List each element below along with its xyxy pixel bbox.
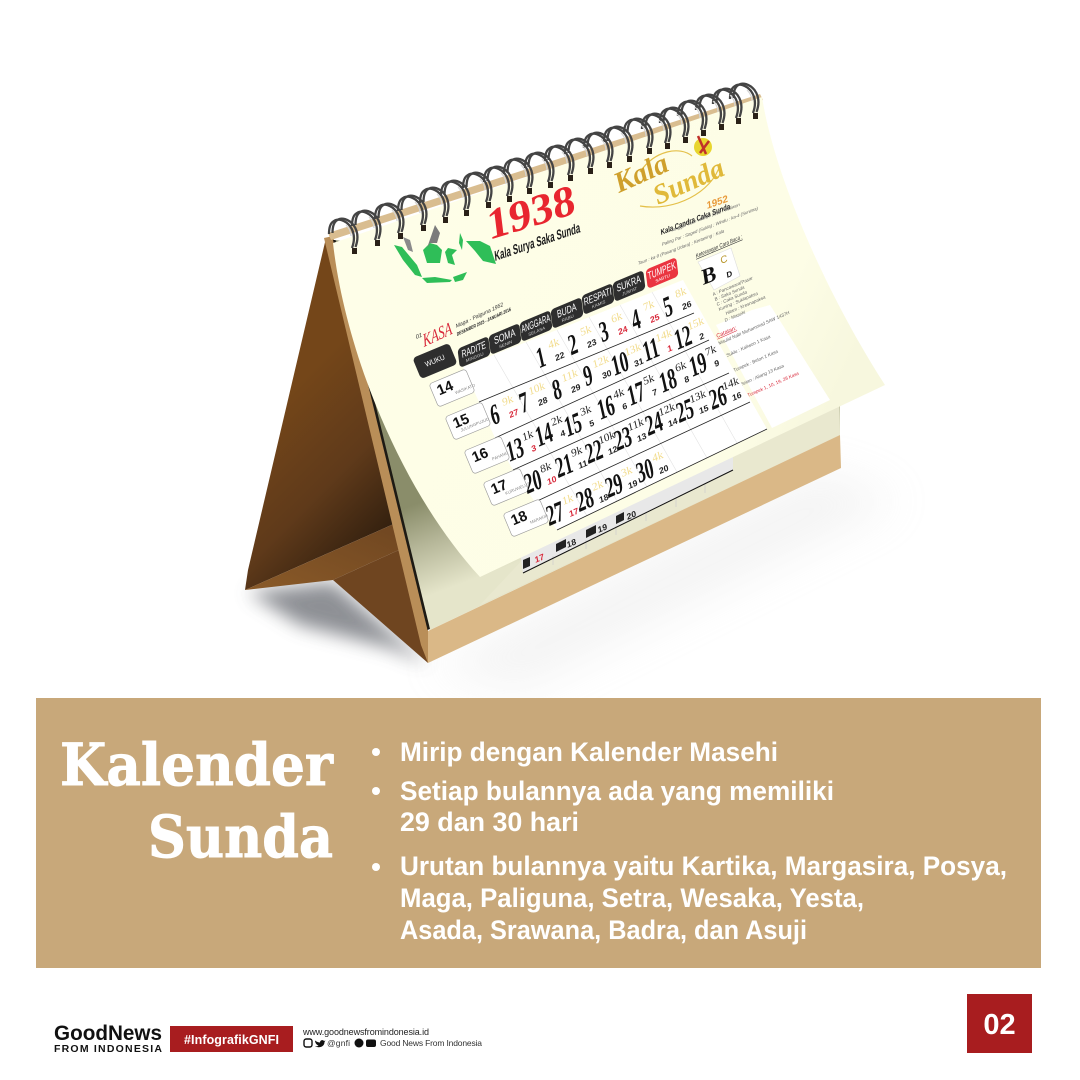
calendar dates: 5 xyxy=(661,290,676,325)
calendar dates: 3 xyxy=(597,315,612,350)
page number xyxy=(967,994,1032,1053)
lower page peek: 20 xyxy=(626,508,637,522)
calendar dates: 15 xyxy=(698,403,710,416)
spine band xyxy=(328,94,763,240)
ANGGARA: ANGGARA xyxy=(521,312,551,336)
bullet: month length xyxy=(372,776,834,837)
calendar dates: 5k xyxy=(579,323,593,339)
panel heading xyxy=(60,731,334,871)
grid lines xyxy=(479,292,767,530)
calendar dates: 22 xyxy=(554,350,566,363)
footer logo: GoodNews xyxy=(54,1022,162,1045)
WUKU: WUKU xyxy=(424,352,446,369)
TUMPEK: SABTU xyxy=(655,273,670,284)
calendar dates: 28 xyxy=(537,395,549,408)
calendar dates: 26 xyxy=(681,299,693,312)
notes: Suklu : Kaliwon 1 Kasa xyxy=(726,334,771,358)
calendar dates: 6 xyxy=(488,398,503,433)
wuku 17: KURUWELUT xyxy=(504,481,531,496)
desk calendar xyxy=(245,84,885,663)
calendar dates: 1k xyxy=(521,428,535,444)
SUKRA xyxy=(612,270,646,302)
SOMA: SOMA xyxy=(493,327,516,347)
wuku 17: 17 xyxy=(489,477,510,498)
calendar dates: 24 xyxy=(643,406,666,443)
calendar dates: 7 xyxy=(517,386,532,421)
calendar dates: 9k xyxy=(501,393,515,409)
lower page peek: 18 xyxy=(566,536,577,550)
calendar dates: 5k xyxy=(642,372,656,388)
calendar dates: 14k xyxy=(722,375,740,393)
calendar dates: 8 xyxy=(683,374,690,385)
page number: 02 xyxy=(983,1009,1016,1041)
hashtag badge: #InfografikGNFI xyxy=(184,1033,279,1047)
wuku 14 xyxy=(429,368,478,407)
calendar dates: 15k xyxy=(687,315,705,333)
Kala Sunda logo xyxy=(608,136,729,211)
wuku 14: WASIKATO xyxy=(454,382,477,395)
reading key: Kuning : Suklapaksa xyxy=(718,291,759,312)
calendar dates: 4k xyxy=(547,336,561,352)
calendar dates: 9k xyxy=(570,444,584,460)
calendar dates: 25 xyxy=(649,312,661,325)
calendar dates: 10 xyxy=(546,474,558,487)
TUMPEK xyxy=(645,257,679,289)
RESPATI xyxy=(581,283,615,315)
calendar dates: 3 xyxy=(530,443,537,454)
bullet: month order: Asada, Srawana, Badra, dan Asuji xyxy=(400,915,807,945)
calendar dates: 12 xyxy=(672,320,695,357)
ANGGARA xyxy=(519,310,553,342)
calendar dates: 18 xyxy=(598,492,610,505)
1952 block: Tanggal Taun : ka-1 / 1952 : Kaliwon xyxy=(671,202,740,233)
notes: Catatan: xyxy=(716,325,738,340)
tan base xyxy=(428,435,841,663)
weekday headers xyxy=(412,257,679,379)
footer logo xyxy=(54,1022,162,1055)
info panel xyxy=(36,698,1041,968)
RESPATI: KAMIS xyxy=(592,299,606,309)
hashtag badge xyxy=(170,1026,293,1052)
spiral binding xyxy=(329,84,759,254)
calendar dates: 19 xyxy=(687,347,710,384)
TUMPEK: TUMPEK xyxy=(647,259,677,283)
reading key: A : Pancawara/Pasar xyxy=(712,275,754,297)
calendar dates: 6k xyxy=(674,359,688,375)
tent floor fold xyxy=(245,523,401,590)
calendar dates: 31 xyxy=(633,356,645,369)
notes xyxy=(716,310,800,398)
calendar dates: 29 xyxy=(603,468,626,505)
calendar dates: 10k xyxy=(598,429,616,447)
panel heading: Kalender xyxy=(60,731,334,799)
calendar dates: 14k xyxy=(655,327,673,345)
wuku 16: PAHANG xyxy=(491,450,509,461)
notes: Tumpek 1, 10, 19, 28 Kasa xyxy=(747,370,800,398)
calendar dates: 30 xyxy=(601,368,613,381)
1952 block: Kala Candra Caka Sunda xyxy=(660,202,731,237)
icon: youtube xyxy=(366,1040,376,1047)
wuku 16: 16 xyxy=(470,445,491,466)
calendar dates: 4k xyxy=(651,449,665,465)
icon: instagram xyxy=(304,1039,312,1047)
wuku 15: JULUNGPUJUD xyxy=(460,416,490,433)
SOMA xyxy=(488,323,522,355)
calendar dates: 23 xyxy=(612,421,635,458)
calendar dates: 15 xyxy=(562,407,585,444)
year 1938: 1938 xyxy=(484,175,577,250)
calendar dates: 26 xyxy=(707,380,730,417)
calendar dates: 19 xyxy=(627,478,639,491)
reading key: C : Caka Sunda xyxy=(716,289,748,307)
calendar dates: 16 xyxy=(595,390,618,427)
sheet black edge xyxy=(333,240,430,630)
calendar dates: 22 xyxy=(583,434,606,471)
calendar dates: 3k xyxy=(579,403,593,419)
calendar dates: 4 xyxy=(629,303,644,338)
1952 block: 1952 xyxy=(706,194,729,212)
calendar dates: 10k xyxy=(528,380,546,398)
calendar dates: 23 xyxy=(586,337,598,350)
icon: facebook xyxy=(354,1038,364,1048)
calendar dates: 20 xyxy=(522,464,545,501)
calendar dates: 16 xyxy=(731,390,743,403)
cream lower sheet xyxy=(480,380,840,605)
calendar dates: 1 xyxy=(666,343,673,354)
calendar dates: 2 xyxy=(566,328,581,363)
tent right flap xyxy=(333,549,428,663)
BUDA xyxy=(550,297,584,329)
calendar dates: 4 xyxy=(559,428,566,439)
month heading: Maga - Palguna 1952 xyxy=(456,302,503,330)
right note white panel xyxy=(716,305,830,428)
Kala Sunda logo: Kala xyxy=(608,147,673,200)
footer contacts: @gnfi xyxy=(327,1038,350,1048)
tent back face xyxy=(245,238,400,590)
calendar dates: 8 xyxy=(550,373,565,408)
calendar dates: 21 xyxy=(553,448,576,485)
calendar dates: 1k xyxy=(561,492,575,508)
bullet: similar to Masehi: Mirip dengan Kalender Masehi xyxy=(400,737,778,767)
wuku 17 xyxy=(483,466,533,506)
BUDA: BUDA xyxy=(556,301,577,321)
month heading xyxy=(416,302,511,351)
wuku 18 xyxy=(503,498,550,537)
calendar dates: 9 xyxy=(581,359,596,394)
calendar dates: 9 xyxy=(713,358,720,369)
calendar dates: 3k xyxy=(620,464,634,480)
reading key: B : Saka Sunda xyxy=(714,284,745,302)
calendar dates: 25 xyxy=(674,393,697,430)
wuku 14: 14 xyxy=(435,378,457,399)
calendar dates: 12 xyxy=(607,444,619,457)
reading key: D : Masehi xyxy=(724,310,746,323)
calendar dates: 28 xyxy=(574,482,597,519)
cardboard edge xyxy=(324,236,428,663)
wuku 18: MARAKIH xyxy=(529,513,549,525)
calendar dates: 20 xyxy=(658,463,670,476)
calendar dates: 11k xyxy=(627,416,645,434)
Kala Sunda logo: Sunda xyxy=(648,153,729,211)
calendar dates: 6k xyxy=(610,310,624,326)
calendar dates: 2k xyxy=(550,413,564,429)
wuku 15 xyxy=(445,402,491,440)
calendar dates: 13 xyxy=(504,432,527,469)
ANGGARA: SELASA xyxy=(528,325,545,337)
month heading: 01 xyxy=(416,332,423,341)
main page xyxy=(333,97,885,577)
calendar dates: 12k xyxy=(658,401,676,419)
RADITE: RADITE xyxy=(461,339,486,361)
wuku 18: 18 xyxy=(509,508,530,529)
calendar dates: 11k xyxy=(561,367,579,385)
calendar dates: 14 xyxy=(533,417,556,454)
calendar grid background xyxy=(463,280,767,530)
calendar dates: 17 xyxy=(625,376,648,413)
calendar dates: 5 xyxy=(588,418,595,429)
notes: Tumpek : Belon 1 Kasa xyxy=(733,348,779,373)
1952 block: Paling Par : Soged (Sukla) ; Windu : ka-4 (Sunima) xyxy=(662,205,759,247)
calendar dates: 7k xyxy=(704,343,718,359)
calendar dates: 11 xyxy=(640,332,662,369)
RADITE: MINGGU xyxy=(466,351,484,363)
1952 block: Taun : ka-9 (Pasang Udara) ; Kertaning : Kala xyxy=(638,228,725,266)
reading key: B xyxy=(700,260,718,290)
panel heading: Sunda xyxy=(148,803,333,871)
bullet: month length: Setiap bulannya ada yang memiliki xyxy=(400,776,834,806)
bullet: month length: 29 dan 30 hari xyxy=(400,807,579,837)
icon: twitter xyxy=(315,1040,326,1047)
calendar dates: 13k xyxy=(624,341,642,359)
calendar dates: 8k xyxy=(674,285,688,301)
SUKRA: SUKRA xyxy=(616,273,642,295)
back sheet xyxy=(334,240,840,630)
RADITE xyxy=(457,336,491,368)
wuku 15: 15 xyxy=(451,411,472,432)
wuku 16 xyxy=(464,436,511,474)
map of Indonesia xyxy=(394,225,496,283)
calendar dates: 13k xyxy=(689,388,707,406)
calendar dates: 7 xyxy=(651,387,658,398)
reading key: D xyxy=(726,269,733,280)
reading key: Hitam : Kresnapaksa xyxy=(725,294,766,316)
calendar dates: 18 xyxy=(657,363,680,400)
lower page peek xyxy=(520,450,733,573)
footer logo: FROM INDONESIA xyxy=(54,1043,162,1055)
floor shadow xyxy=(248,470,900,690)
calendar dates: 2 xyxy=(698,331,705,342)
calendar dates: 11 xyxy=(577,458,588,471)
reading key: C xyxy=(720,254,728,267)
Kala Surya Saka Sunda: Kala Surya Saka Sunda xyxy=(494,219,581,264)
calendar dates: 12k xyxy=(592,353,610,371)
lower page peek: 19 xyxy=(597,521,608,535)
bullet: month order xyxy=(372,851,1007,945)
lower page peek: 17 xyxy=(534,551,545,565)
calendar dates: 27 xyxy=(508,407,520,420)
calendar dates: 2k xyxy=(591,478,605,494)
calendar dates xyxy=(488,283,744,533)
1952 block xyxy=(638,194,759,266)
calendar dates: 10 xyxy=(609,346,632,383)
calendar dates: 30 xyxy=(634,453,657,490)
month heading: KASA xyxy=(420,317,454,351)
BUDA: RABU xyxy=(561,313,574,323)
wuku row labels xyxy=(429,368,550,537)
calendar dates: 17 xyxy=(568,506,580,519)
notes: Maulid Nabi Muhammad SAW 1437H xyxy=(718,310,790,346)
1952 block: Keterangan Cara Baca : xyxy=(696,233,743,260)
SOMA: SENIN xyxy=(499,339,513,349)
bullet: month order: Urutan bulannya yaitu Kartika, Margasira, Posya, xyxy=(400,851,1007,881)
WUKU xyxy=(412,343,458,379)
calendar dates: 8k xyxy=(539,460,553,476)
calendar dates: 7k xyxy=(642,298,656,314)
calendar dates: 13 xyxy=(636,431,648,444)
footer contacts xyxy=(302,1027,482,1048)
calendar dates: 14 xyxy=(667,416,679,429)
RESPATI: RESPATI xyxy=(583,286,612,309)
calendar dates: 6 xyxy=(621,401,628,412)
reading key xyxy=(698,248,766,323)
month heading: DESEMBER 2015 - JANUARI 2016 xyxy=(457,307,511,338)
footer contacts: Good News From Indonesia xyxy=(380,1038,482,1048)
notes: Setan : Aliang 13 Kasa xyxy=(740,363,785,387)
calendar dates: 27 xyxy=(544,496,567,533)
calendar dates: 1 xyxy=(534,341,549,376)
calendar dates: 4k xyxy=(612,386,626,402)
calendar dates: 29 xyxy=(570,382,582,395)
bullet: month order: Maga, Paliguna, Setra, Wesaka, Yesta, xyxy=(400,883,864,913)
footer contacts: www.goodnewsfromindonesia.id xyxy=(302,1027,429,1037)
SUKRA: JUM'AT xyxy=(622,286,638,297)
calendar dates: 24 xyxy=(617,324,629,337)
